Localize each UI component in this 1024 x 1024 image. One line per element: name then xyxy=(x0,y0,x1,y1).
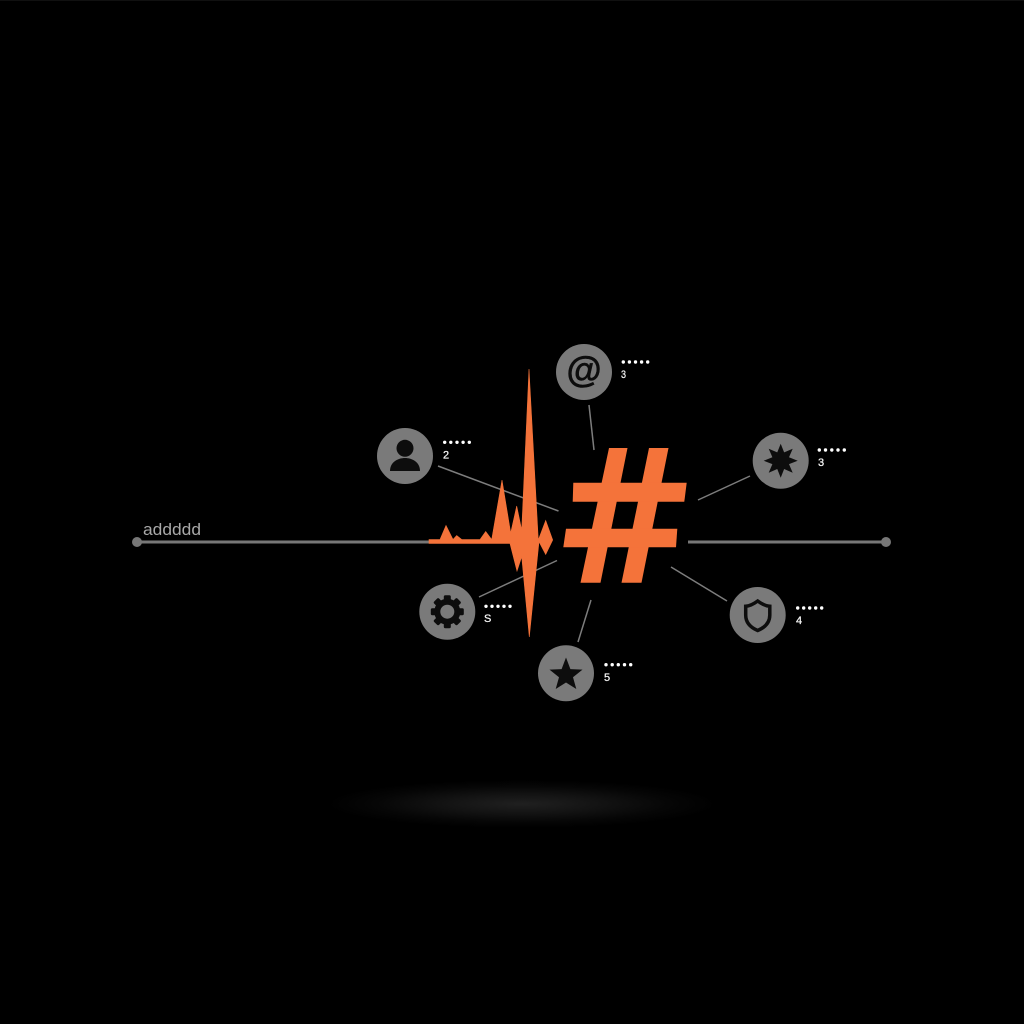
node number: 3 xyxy=(621,369,626,381)
connector: gear to hash xyxy=(479,560,557,597)
rating dots xyxy=(818,448,846,452)
icon: burst xyxy=(764,444,798,478)
node number: 4 xyxy=(796,615,802,627)
node number: 3 xyxy=(818,457,824,469)
node: shield xyxy=(730,587,823,643)
node: star xyxy=(538,645,632,701)
timeline label: addddd xyxy=(143,520,201,539)
rating dots xyxy=(622,360,649,364)
floor glow xyxy=(327,780,717,828)
node: gear xyxy=(419,584,512,640)
rating dots xyxy=(443,441,471,444)
connector: person to hash xyxy=(438,466,558,511)
node number: 2 xyxy=(443,450,449,462)
node number: 5 xyxy=(604,672,610,684)
icon: at sign: @ xyxy=(566,349,602,390)
rating dots xyxy=(484,605,512,608)
rating dots xyxy=(604,663,632,666)
timeline: left segment xyxy=(132,537,432,547)
icon: star xyxy=(550,658,582,689)
timeline: right segment xyxy=(688,537,891,547)
node number: S xyxy=(484,613,491,625)
icon: gear xyxy=(431,595,464,628)
connector: star to hash xyxy=(578,600,591,642)
hash symbol xyxy=(563,448,687,583)
icon: shield xyxy=(746,601,770,630)
icon: person xyxy=(390,440,420,471)
connector: at to hash xyxy=(589,405,594,450)
orange waveform xyxy=(429,369,553,637)
node: at sign xyxy=(556,344,649,400)
node: person xyxy=(377,428,471,484)
node: burst xyxy=(753,433,846,489)
rating dots xyxy=(796,606,823,610)
connector: shield to hash xyxy=(671,567,727,601)
connector: burst to hash xyxy=(698,476,750,500)
